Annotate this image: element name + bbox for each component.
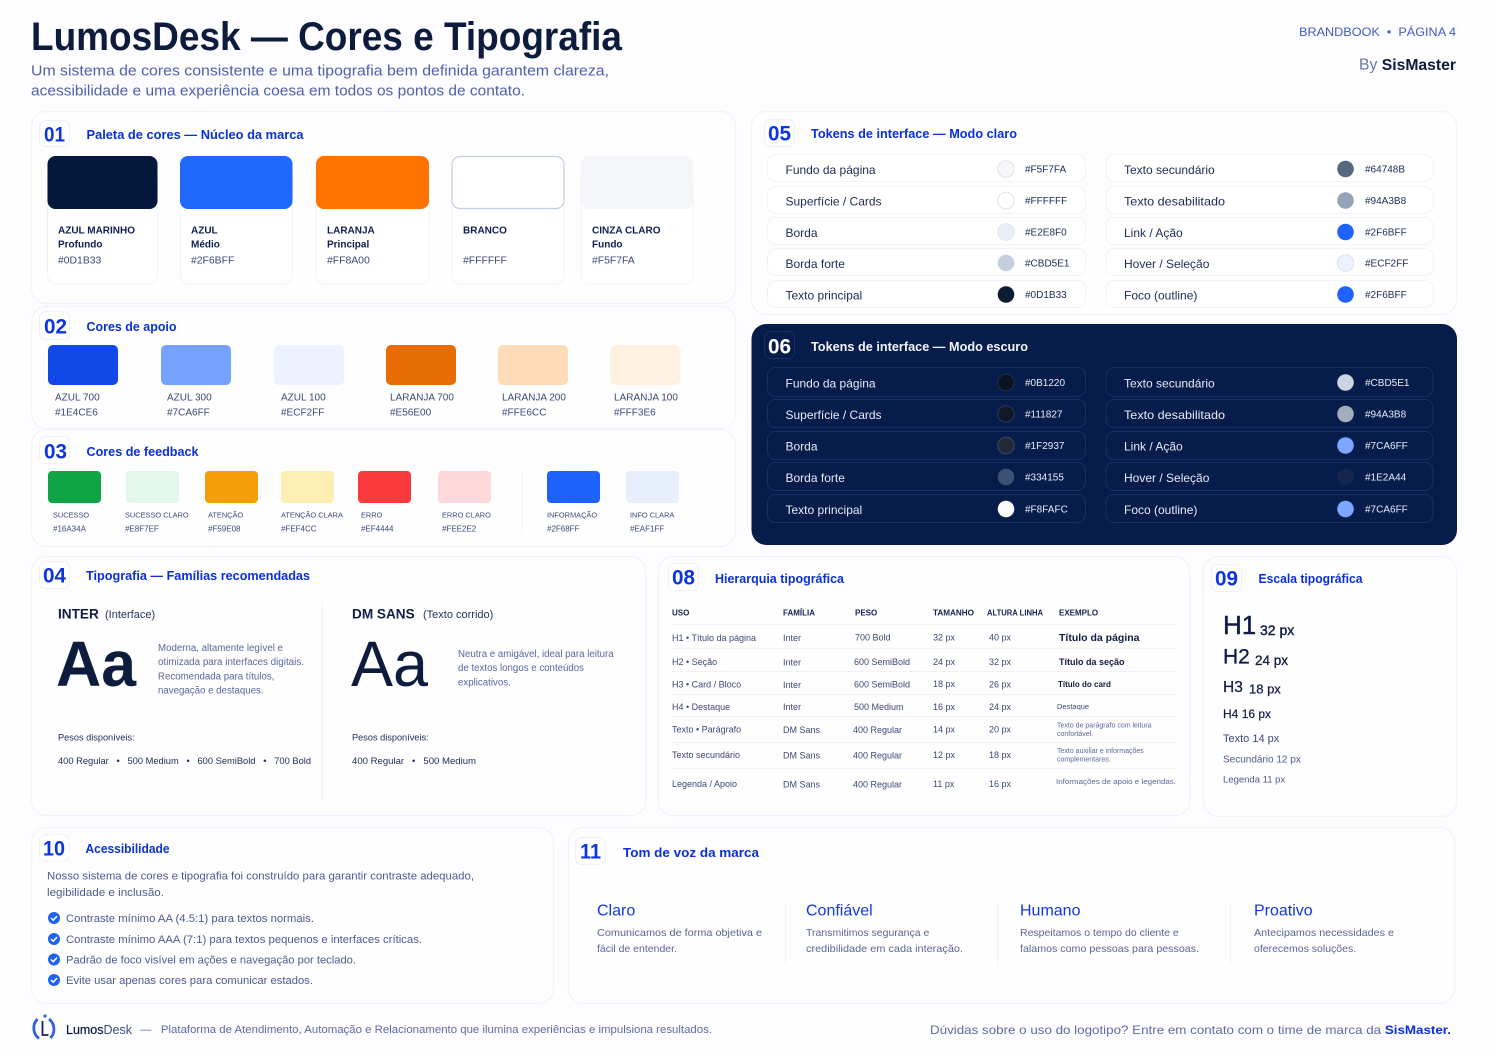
swatch: info clara [626, 471, 679, 533]
token row: Texto desabilitado [1124, 194, 1225, 208]
row secundario: complementares. [1057, 756, 1111, 763]
token row: Hover / Seleção [1124, 257, 1210, 271]
token row [1106, 400, 1433, 428]
row h3: 26 px [989, 679, 1012, 689]
swatch: erro claro: ERRO CLARO [442, 510, 491, 519]
swatch: laranja 200 [498, 345, 568, 418]
swatch: laranja: Principal [327, 239, 369, 250]
row legenda: 400 Regular [853, 779, 902, 789]
scale h2: H2 [1223, 645, 1250, 668]
font dm sans: (Texto corrido) [423, 609, 493, 621]
swatch: azul: Médio [191, 239, 220, 250]
badge 08 [668, 564, 698, 590]
token row: Texto desabilitado [1124, 408, 1225, 422]
row legenda: 11 px [933, 779, 955, 789]
token row: #ECF2FF [1365, 258, 1408, 269]
panel: 09 escala tipografica [1204, 556, 1456, 816]
panel: 01 paleta de cores [32, 112, 736, 304]
byline: By SisMaster [1359, 56, 1456, 73]
row h4: Inter [783, 702, 801, 712]
badge 10 [40, 834, 70, 862]
row secundario [672, 748, 1144, 763]
swatch: informacao: INFORMAÇÃO [547, 510, 597, 519]
table header: TAMANHO [933, 608, 974, 617]
row h2: Inter [783, 657, 801, 667]
check item: Contraste mínimo AAA (7:1) para textos pequenos e interfaces críticas. [66, 934, 422, 946]
font inter [56, 606, 311, 766]
swatch: azul 100: #ECF2FF [281, 407, 324, 418]
row h1: 32 px [933, 632, 956, 642]
swatch: laranja 100: LARANJA 100 [614, 392, 678, 403]
badge 05: 05 [768, 122, 791, 145]
check item: Padrão de foco visível em ações e navegação por teclado. [66, 954, 356, 966]
token row: Foco (outline) [1124, 288, 1197, 302]
scale texto: Texto 14 px [1223, 733, 1280, 745]
row secundario: Texto auxiliar e informações [1057, 748, 1144, 755]
badge 02 [40, 312, 70, 340]
badge 08: 08 [672, 566, 695, 589]
panel: 04 tipografia [32, 556, 646, 816]
font inter: (Interface) [105, 609, 155, 621]
row h4: Destaque [1057, 702, 1089, 711]
scale h1: H1 [1223, 610, 1256, 640]
token row: #334155 [1025, 472, 1064, 483]
heading 08: Hierarquia tipográfica [715, 572, 845, 586]
row h3: H3 • Card / Bloco [672, 679, 741, 689]
intro text [47, 870, 474, 899]
swatch: branco: #FFFFFF [463, 255, 507, 266]
row h3: 18 px [933, 679, 956, 689]
swatch: atencao: ATENÇÃO [208, 510, 243, 519]
token row [1106, 218, 1433, 244]
token row: Texto principal [786, 503, 862, 517]
token row [768, 248, 1086, 276]
subtitle: Um sistema de cores consistente e uma tipografia bem definida garantem clareza, [31, 62, 609, 79]
voice: claro: Claro [597, 902, 635, 919]
font dm sans: 400 Regular • 500 Medium [352, 756, 476, 766]
token row: Texto principal [786, 288, 862, 302]
voice: claro: Comunicamos de forma objetiva e [597, 927, 762, 939]
swatch: azul 100: AZUL 100 [281, 392, 326, 403]
heading 01: Paleta de cores — Núcleo da marca [86, 128, 305, 142]
scale h4: H4 16 px [1223, 707, 1271, 721]
token row: Borda forte [786, 471, 845, 485]
row legenda: 16 px [989, 779, 1012, 789]
row legenda [672, 779, 1176, 789]
swatch: azul 700: #1E4CE6 [55, 407, 98, 418]
badge 01 [40, 120, 70, 146]
swatch: azul 300: AZUL 300 [167, 392, 212, 403]
token row: #7CA6FF [1365, 441, 1408, 452]
swatch: cinza claro [581, 156, 693, 284]
token row: #2F6BFF [1365, 227, 1407, 238]
font dm sans: Neutra e amigável, ideal para leitura [458, 649, 614, 660]
token row: #2F6BFF [1365, 290, 1407, 301]
table header: ALTURA LINHA [987, 608, 1043, 617]
heading 09: Escala tipográfica [1258, 572, 1364, 586]
swatch: atencao [205, 471, 258, 533]
row h1 [672, 632, 1140, 644]
token row: #64748B [1365, 164, 1405, 175]
token row: #E2E8F0 [1025, 227, 1067, 238]
row h4 [672, 702, 1089, 712]
row secundario: DM Sans [783, 750, 821, 760]
row secundario: 400 Regular [853, 750, 902, 760]
badge 01: 01 [44, 123, 65, 146]
subtitle: acessibilidade e uma experiência coesa em todos os pontos de contato. [31, 82, 525, 99]
token row: #0B1220 [1025, 378, 1065, 389]
token row: Fundo da página [786, 376, 876, 390]
panel: 11 tom de voz [568, 828, 1454, 1004]
row h2: 24 px [933, 657, 956, 667]
token row [768, 400, 1086, 428]
row legenda: DM Sans [783, 779, 821, 789]
font inter: Moderna, altamente legível e [158, 643, 283, 654]
row legenda: Legenda / Apoio [672, 779, 737, 789]
heading 02: Cores de apoio [86, 320, 177, 334]
token row [768, 462, 1086, 490]
swatch: azul 300: #7CA6FF [167, 407, 210, 418]
title: LumosDesk — Cores e Tipografia [31, 15, 623, 59]
swatch: azul: AZUL [191, 225, 218, 236]
font dm sans: de textos longos e conteúdos [458, 663, 584, 674]
scale h3: 18 px [1249, 681, 1281, 696]
token row [1106, 154, 1433, 182]
badge 03 [40, 436, 70, 464]
swatch: azul marinho: Profundo [58, 239, 102, 250]
token row: #94A3B8 [1365, 409, 1407, 420]
intro text: Nosso sistema de cores e tipografia foi construído para garantir contraste adequado, [47, 870, 474, 882]
row h4: 24 px [989, 702, 1012, 712]
footer: logo [34, 1014, 54, 1038]
heading 03: Cores de feedback [86, 445, 199, 459]
swatch: cinza claro: Fundo [592, 239, 623, 250]
panel: 05 tokens modo claro [752, 112, 1456, 314]
swatch: atencao clara [281, 471, 343, 533]
badge 06 [764, 332, 794, 358]
voice: proativo [1254, 902, 1394, 955]
swatch: azul marinho: AZUL MARINHO [58, 225, 135, 236]
font inter: navegação e destaques. [158, 685, 264, 696]
row texto: 14 px [933, 724, 956, 734]
swatch: laranja 100: #FFF3E6 [614, 407, 656, 418]
token row: Fundo da página [786, 163, 876, 177]
voice: confiavel [806, 902, 963, 955]
row h1: H1 • Título da página [672, 633, 756, 643]
badge 09: 09 [1215, 567, 1238, 590]
token row [768, 280, 1086, 308]
token row: #FFFFFF [1025, 196, 1067, 207]
font inter: INTER [58, 606, 99, 621]
token row [1106, 186, 1433, 214]
table header: PESO [855, 608, 877, 617]
row texto [672, 722, 1152, 738]
token row [1106, 280, 1433, 308]
row h4: H4 • Destaque [672, 702, 730, 712]
swatch: sucesso: #16A34A [53, 524, 87, 533]
token row: #CBD5E1 [1025, 258, 1070, 269]
token row: #CBD5E1 [1365, 378, 1410, 389]
token row [1106, 248, 1433, 276]
voice: humano: Humano [1020, 902, 1081, 919]
swatch: sucesso claro: #E8F7EF [125, 524, 159, 533]
voice: humano: falamos como pessoas para pessoas. [1020, 943, 1199, 955]
swatch: atencao: #F59E08 [208, 524, 241, 533]
row secundario: 12 px [933, 750, 956, 760]
scale h3: H3 [1223, 679, 1243, 696]
font inter: 400 Regular • 500 Medium • 600 SemiBold • 700 Bold [58, 756, 311, 766]
heading 04: Tipografia — Famílias recomendadas [86, 569, 310, 583]
badge 11 [576, 838, 606, 864]
row legenda: Informações de apoio e legendas. [1056, 779, 1176, 786]
swatch: branco [452, 156, 564, 284]
panel: 03 cores de feedback [32, 430, 736, 546]
token row: Link / Ação [1124, 226, 1183, 240]
voice: claro [597, 902, 762, 955]
voice: confiavel: Confiável [806, 902, 873, 919]
voice: proativo: oferecemos soluções. [1254, 943, 1356, 955]
swatch: info clara: INFO CLARA [630, 510, 674, 519]
row h1: 700 Bold [855, 632, 891, 642]
badge 04: 04 [43, 564, 66, 587]
scale secundario: Secundário 12 px [1223, 754, 1301, 765]
scale h1: 32 px [1260, 622, 1294, 638]
swatch: sucesso: SUCESSO [53, 510, 89, 519]
font dm sans: explicativos. [458, 677, 511, 688]
token row: Foco (outline) [1124, 503, 1197, 517]
badge 06: 06 [768, 335, 791, 358]
table header [672, 608, 1098, 617]
page tag: BRANDBOOK • PÁGINA 4 [1299, 24, 1456, 39]
subtitle [31, 62, 609, 99]
token row [768, 494, 1086, 522]
swatch: sucesso claro: SUCESSO CLARO [125, 510, 189, 519]
swatch: branco: BRANCO [463, 225, 507, 236]
panel: 06 tokens modo escuro [752, 324, 1457, 545]
row h4: 500 Medium [854, 702, 904, 712]
row texto: DM Sans [783, 725, 821, 735]
panel: 02 cores de apoio [32, 306, 736, 428]
footer: wordmark: LumosDesk [66, 1023, 133, 1037]
swatch: sucesso claro [125, 471, 189, 533]
token row: #0D1B33 [1025, 290, 1067, 301]
badge 11: 11 [580, 840, 601, 863]
table header: USO [672, 608, 689, 617]
token row [768, 368, 1086, 396]
swatch: erro [358, 471, 411, 533]
row h3: Inter [783, 680, 801, 690]
voice: proativo: Antecipamos necessidades e [1254, 927, 1394, 939]
row texto: 20 px [989, 724, 1012, 734]
token row [1106, 494, 1433, 522]
row h3 [672, 679, 1111, 690]
swatch: erro: ERRO [361, 510, 383, 519]
font dm sans: Pesos disponíveis: [352, 732, 429, 742]
font dm sans: Aa [351, 628, 428, 700]
badge 09 [1212, 564, 1242, 592]
panel: 08 hierarquia tipografica [658, 556, 1190, 816]
scale legenda: Legenda 11 px [1223, 774, 1285, 785]
token row [768, 154, 1086, 182]
swatch: azul: #2F6BFF [191, 255, 234, 266]
token row: Hover / Seleção [1124, 471, 1210, 485]
token row [1106, 462, 1433, 490]
token row [1106, 432, 1433, 460]
swatch: azul 300 [161, 345, 231, 418]
row h4: 16 px [933, 702, 956, 712]
scale h2: 24 px [1255, 652, 1288, 667]
row h2: 32 px [989, 657, 1012, 667]
font dm sans [351, 606, 614, 766]
voice: humano: Respeitamos o tempo do cliente e [1020, 927, 1179, 939]
row texto: Texto • Parágrafo [672, 724, 741, 734]
font inter: Aa [56, 628, 136, 700]
row h2: H2 • Seção [672, 657, 717, 667]
swatch: informacao [547, 471, 600, 533]
swatch: erro claro [438, 471, 491, 533]
badge 02: 02 [44, 315, 67, 338]
token row: #F8FAFC [1025, 504, 1068, 515]
row h1: Título da página [1059, 632, 1140, 644]
table header: FAMÍLIA [783, 608, 815, 617]
token row: Texto secundário [1124, 163, 1215, 177]
check item: Contraste mínimo AA (4.5:1) para textos normais. [66, 913, 314, 925]
token row: #F5F7FA [1025, 164, 1066, 175]
heading 05: Tokens de interface — Modo claro [811, 127, 1017, 141]
heading 10: Acessibilidade [86, 842, 170, 856]
token row [768, 432, 1086, 460]
token row: Superfície / Cards [786, 408, 882, 422]
token row: #111827 [1025, 409, 1063, 420]
swatch: azul marinho: #0D1B33 [58, 255, 102, 266]
token row: Borda [786, 439, 818, 453]
swatch: laranja 200: LARANJA 200 [502, 392, 566, 403]
row h3: 600 SemiBold [854, 679, 910, 689]
swatch: laranja 700: #E56E00 [390, 407, 432, 418]
voice: proativo: Proativo [1254, 902, 1313, 919]
swatch: atencao clara: #FEF4CC [281, 524, 317, 533]
heading 11: Tom de voz da marca [623, 845, 760, 860]
badge 10: 10 [43, 837, 65, 860]
token row: Link / Ação [1124, 439, 1183, 453]
swatch: azul 700 [48, 345, 118, 418]
token row: Borda forte [786, 257, 845, 271]
token row [768, 218, 1086, 244]
panel: 10 acessibilidade [32, 828, 554, 1004]
row h2: Título da seção [1059, 657, 1125, 667]
row h2: 600 SemiBold [854, 657, 910, 667]
row texto: confortável. [1057, 731, 1093, 738]
swatch: laranja: #FF8A00 [327, 255, 370, 266]
badge 05 [764, 120, 794, 146]
swatch: laranja [316, 156, 429, 284]
voice: claro: fácil de entender. [597, 943, 677, 955]
swatch: info clara: #EAF1FF [630, 524, 664, 533]
row texto: Texto de parágrafo com leitura [1057, 722, 1152, 729]
swatch: azul 700: AZUL 700 [55, 392, 100, 403]
swatch: informacao: #2F68FF [547, 524, 580, 533]
intro text: legibilidade e inclusão. [47, 887, 164, 899]
heading 06: Tokens de interface — Modo escuro [811, 340, 1028, 354]
voice: humano [1020, 902, 1199, 955]
token row: #94A3B8 [1365, 196, 1407, 207]
table header: EXEMPLO [1059, 608, 1098, 617]
font inter: Pesos disponíveis: [58, 732, 135, 742]
row texto: 400 Regular [853, 725, 902, 735]
token row [768, 186, 1086, 214]
footer: contact: Dúvidas sobre o uso do logotipo? Entre em contato com o time de marca da SisMaster. [930, 1023, 1451, 1037]
font inter: otimizada para interfaces digitais. [158, 657, 304, 668]
check item: Evite usar apenas cores para comunicar estados. [66, 975, 313, 987]
token row: Borda [786, 226, 818, 240]
badge 03: 03 [44, 440, 67, 463]
token row: Texto secundário [1124, 376, 1215, 390]
swatch: azul [180, 156, 292, 284]
swatch: azul 100 [274, 345, 344, 418]
row secundario: 18 px [989, 750, 1012, 760]
swatch: laranja 700 [386, 345, 456, 418]
swatch: laranja: LARANJA [327, 225, 375, 236]
badge 04 [40, 562, 70, 588]
row h1: 40 px [989, 632, 1012, 642]
voice: confiavel: Transmitimos segurança e [806, 927, 929, 939]
token row: Superfície / Cards [786, 194, 882, 208]
footer: tagline: — Plataforma de Atendimento, Automação e Relacionamento que ilumina experiências e impulsiona resultados. [140, 1024, 712, 1036]
voice: confiavel: credibilidade em cada interação. [806, 943, 963, 955]
swatch: laranja 700: LARANJA 700 [390, 392, 454, 403]
swatch: azul marinho [48, 156, 158, 284]
swatch: sucesso [48, 471, 101, 533]
token row: #1E2A44 [1365, 472, 1407, 483]
row h3: Título do card [1058, 680, 1111, 689]
font inter: Recomendada para títulos, [158, 671, 274, 682]
swatch: atencao clara: ATENÇÃO CLARA [281, 510, 343, 519]
token row: #7CA6FF [1365, 504, 1408, 515]
swatch: cinza claro: #F5F7FA [592, 255, 635, 266]
swatch: laranja 200: #FFE6CC [502, 407, 546, 418]
font dm sans: DM SANS [352, 606, 415, 621]
row h2 [672, 657, 1125, 667]
swatch: erro: #EF4444 [361, 524, 394, 533]
swatch: cinza claro: CINZA CLARO [592, 225, 661, 236]
row secundario: Texto secundário [672, 750, 740, 760]
token row: #1F2937 [1025, 441, 1065, 452]
token row [1106, 368, 1433, 396]
swatch: laranja 100 [610, 345, 680, 418]
swatch: erro claro: #FEE2E2 [442, 524, 477, 533]
row h1: Inter [783, 633, 801, 643]
